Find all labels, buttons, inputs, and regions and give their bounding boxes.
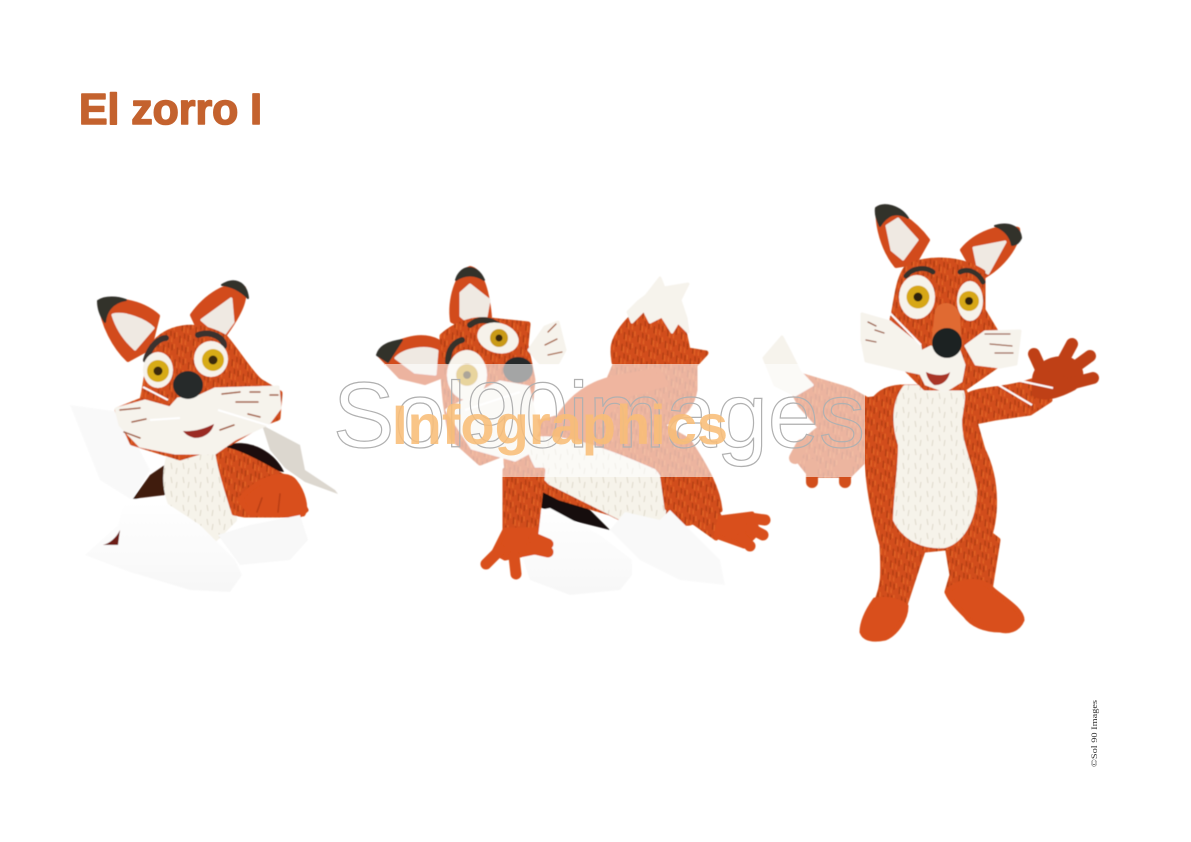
torn paper back bbox=[70, 405, 150, 500]
arm bbox=[217, 448, 306, 515]
head bbox=[442, 319, 533, 463]
right leg bbox=[947, 530, 998, 592]
watermark translucent band bbox=[385, 364, 865, 477]
toes bbox=[257, 494, 280, 512]
right leg bbox=[662, 472, 720, 538]
side ear bbox=[379, 337, 443, 383]
mouth bbox=[926, 372, 950, 385]
left foot bbox=[486, 530, 548, 574]
head bbox=[892, 260, 998, 388]
whisker tuft bbox=[529, 322, 565, 363]
torn paper front bbox=[85, 498, 242, 592]
dark left body bbox=[132, 460, 172, 500]
fox 1 emerging from torn paper bbox=[70, 281, 338, 592]
waving paw bbox=[1032, 344, 1093, 399]
left ear bbox=[100, 300, 158, 360]
left ear bbox=[878, 208, 928, 266]
belly bbox=[527, 438, 664, 528]
title: El zorro I bbox=[79, 85, 262, 134]
eyes bbox=[899, 275, 935, 319]
nose bbox=[173, 371, 203, 399]
right ear bbox=[962, 228, 1018, 276]
torso bbox=[866, 387, 995, 550]
copyright: ©Sol 90 Images bbox=[1090, 700, 1099, 767]
watermark orange text: Infographics bbox=[392, 393, 728, 456]
raised arm bbox=[557, 370, 666, 443]
brows bbox=[448, 320, 498, 362]
cheek fur right bbox=[966, 331, 1020, 367]
body bbox=[506, 402, 720, 528]
cheek fur left bbox=[862, 314, 924, 374]
whiskers bbox=[465, 392, 520, 410]
nose bbox=[932, 328, 962, 358]
right ear bbox=[192, 286, 245, 344]
fox 3 standing and waving bbox=[764, 205, 1093, 639]
black hole bbox=[535, 483, 610, 530]
brows bbox=[146, 333, 224, 360]
paper flap right bbox=[262, 425, 338, 494]
left leg bbox=[872, 540, 925, 610]
left arm and paw bbox=[795, 398, 880, 482]
left leg bbox=[505, 470, 543, 533]
paw bbox=[240, 476, 305, 515]
fox 2 sideways with tail bbox=[377, 268, 765, 595]
tail bbox=[785, 375, 868, 443]
muzzle bbox=[919, 347, 964, 391]
tail white tip bbox=[764, 337, 812, 395]
right foot bbox=[947, 581, 1022, 631]
muzzle and cheek fur bbox=[116, 387, 280, 453]
top ear bbox=[451, 268, 490, 330]
whiskers bbox=[143, 387, 293, 433]
tail bbox=[600, 312, 706, 424]
mouth bbox=[183, 424, 214, 438]
whiskers bbox=[885, 308, 1053, 405]
tail white tip bbox=[628, 278, 688, 332]
nose bbox=[503, 357, 533, 383]
brows bbox=[906, 269, 983, 282]
chest bbox=[165, 450, 235, 540]
snout bbox=[930, 303, 962, 360]
muzzle bbox=[447, 382, 538, 460]
eyes bbox=[474, 318, 522, 358]
right arm bbox=[965, 380, 1050, 423]
eyes bbox=[143, 352, 173, 388]
chest bbox=[895, 387, 975, 546]
dark hole bbox=[226, 443, 284, 472]
torn paper bbox=[520, 508, 632, 595]
left foot bbox=[862, 599, 906, 639]
watermark panel bbox=[333, 363, 865, 477]
right foot bbox=[716, 514, 765, 546]
watermark outline text: Sol90images bbox=[333, 363, 865, 467]
head bbox=[117, 327, 280, 458]
